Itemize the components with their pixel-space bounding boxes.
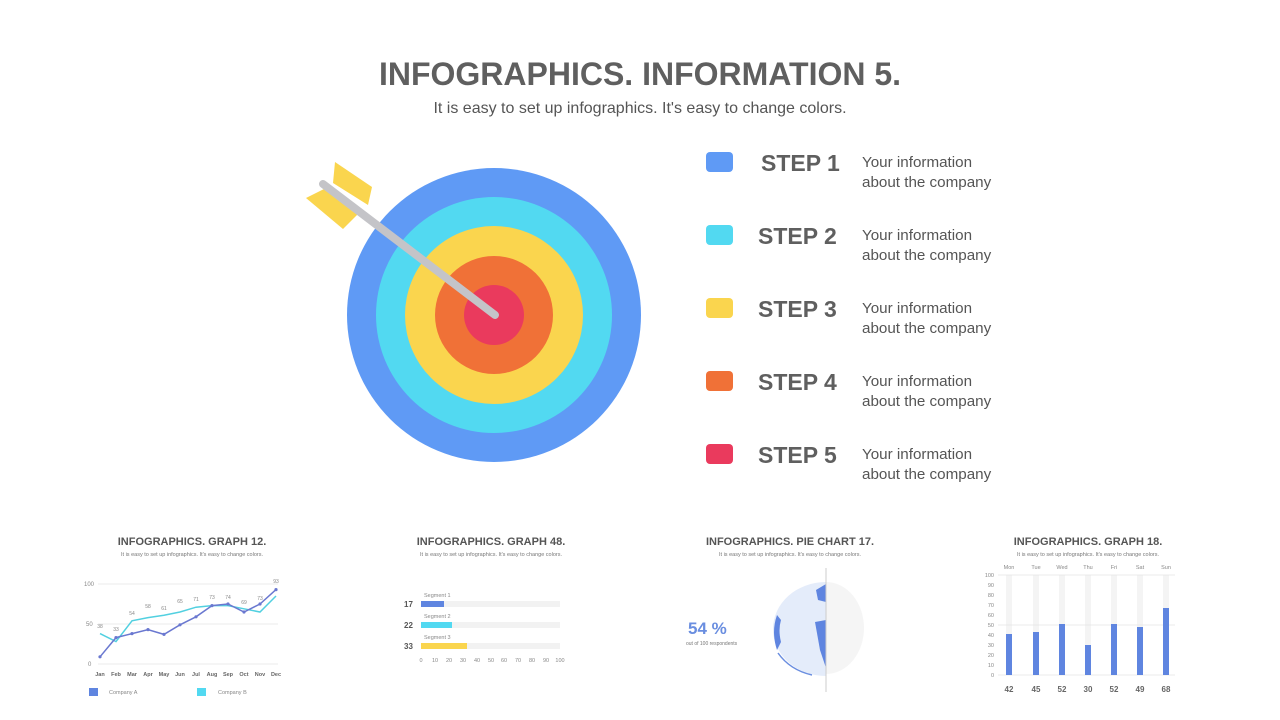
step 5: about the company [862,466,991,482]
panel: graph 18: Sun [1161,565,1171,571]
panel: graph 48: 100 [555,658,565,664]
panel: graph 12: Jun [175,672,186,678]
panel: graph 18: 70 [988,603,994,609]
panel: pie chart 17 [686,536,874,692]
panel: graph 18: 60 [988,613,994,619]
step 2: STEP 2 [758,223,837,249]
panel: graph 12: 74 [225,595,231,601]
subtitle: It is easy to set up infographics. It's easy to change colors. [433,100,847,117]
step 2: about the company [862,246,991,264]
panel: graph 12: Oct [239,672,249,678]
step 4: about the company [862,392,991,410]
panel: graph 12: Company A [109,690,138,696]
panel: graph 48: 30 [460,658,466,664]
step 1: Your information [862,154,972,171]
panel: graph 18: Sat [1136,565,1145,571]
panel: graph 18: 42 [1005,685,1014,694]
panel: graph 12: 65 [177,599,183,605]
panel: graph 48: 20 [446,658,452,664]
panel: graph 18: 50 [988,623,994,629]
panel: graph 12: Jan [95,672,105,678]
panel: graph 12: Jul [192,672,200,678]
panel: graph 18: It is easy to set up infographics. It's easy to change colors. [1017,552,1159,558]
panel: graph 12: 0 [88,662,92,668]
step 3: STEP 3 [758,296,837,322]
panel: pie chart 17: out of 100 respondents [686,641,738,647]
step 4: Your information [862,373,972,390]
panel: graph 12: May [159,672,170,678]
panel: pie chart 17: It is easy to set up infographics. It's easy to change colors. [719,552,861,558]
panel: graph 12: 73 [209,595,215,601]
panel: graph 12: Sep [223,672,234,678]
panel: graph 18: INFOGRAPHICS. GRAPH 18. [1014,536,1162,548]
panel: graph 48: It is easy to set up infographics. It's easy to change colors. [420,552,562,558]
steps list [706,150,992,482]
panel: graph 12: 100 [84,582,95,588]
panel: graph 48: 33 [404,642,413,651]
panel: graph 12: Mar [127,672,138,678]
step 5: Your information [862,446,972,463]
panel: graph 18: 40 [988,633,994,639]
step 1 [706,150,992,190]
panel: graph 12: It is easy to set up infographics. It's easy to change colors. [121,552,263,558]
step 3: Your information [862,300,972,317]
panel: graph 12: 50 [86,622,93,628]
panel: graph 18: 0 [991,673,994,679]
panel: graph 12: 54 [129,611,135,617]
panel: graph 12: 33 [113,627,119,633]
panel: graph 18: 20 [988,653,994,659]
step 5 [706,442,992,482]
panel: pie chart 17: INFOGRAPHICS. PIE CHART 17. [706,536,874,548]
panel: graph 48 [404,536,565,664]
panel: graph 12: INFOGRAPHICS. GRAPH 12. [118,536,266,548]
panel: graph 18: Thu [1083,565,1093,571]
step 3 [706,296,992,336]
panel: graph 48: 60 [501,658,507,664]
panel: graph 12: Nov [255,672,266,678]
panel: graph 48: Segment 2 [424,614,451,620]
step 4 [706,369,992,410]
panel: graph 48: 90 [543,658,549,664]
panel: graph 12 [84,536,281,696]
panel: graph 18: 10 [988,663,994,669]
panel: pie chart 17: 54 % [688,619,727,638]
panel: graph 18: 45 [1032,685,1041,694]
panel: graph 18 [985,536,1175,694]
panel: graph 18: 90 [988,583,994,589]
panel: graph 18: 52 [1110,685,1119,694]
panel: graph 18: Tue [1031,565,1041,571]
panel: graph 48: 70 [515,658,521,664]
panel: graph 12: 38 [97,624,103,630]
panel: graph 48: 80 [529,658,535,664]
panel: graph 18: Wed [1056,565,1068,571]
step 1: STEP 1 [761,150,840,176]
panel: graph 18: Mon [1004,565,1014,571]
panel: graph 48: 50 [488,658,494,664]
panel: graph 48: INFOGRAPHICS. GRAPH 48. [417,536,565,548]
panel: graph 18: Fri [1111,565,1117,571]
panel: graph 48: 10 [432,658,438,664]
panel: graph 48: Segment 1 [424,593,451,599]
panel: graph 12: Company B [218,690,247,696]
step 2: Your information [862,227,972,244]
panel: graph 12: Aug [207,672,217,678]
panel: graph 18: 80 [988,593,994,599]
panel: graph 12: 71 [193,597,199,603]
panel: graph 12: 58 [145,604,151,610]
panel: graph 12: 73 [257,596,263,602]
panel: graph 48: 40 [474,658,480,664]
panel: graph 12: 93 [273,579,279,585]
panel: graph 12: Apr [143,672,154,678]
panel: graph 48: 22 [404,621,413,630]
panel: graph 12: 69 [241,600,247,606]
panel: graph 48: 0 [419,658,423,664]
step 3: about the company [862,320,991,336]
panel: graph 18: 68 [1162,685,1171,694]
step 1: about the company [862,174,991,190]
panel: graph 18: 52 [1058,685,1067,694]
panel: graph 12: Dec [271,672,281,678]
step 2 [706,223,992,264]
panel: graph 48: 17 [404,600,413,609]
panel: graph 18: 30 [988,643,994,649]
panel: graph 18: 100 [985,573,994,579]
step 4: STEP 4 [758,369,837,395]
panel: graph 12: 61 [161,606,167,612]
panel: graph 18: 49 [1136,685,1145,694]
step 5: STEP 5 [758,442,837,468]
title: INFOGRAPHICS. INFORMATION 5. [379,56,901,92]
panel: graph 18: 30 [1084,685,1093,694]
panel: graph 48: Segment 3 [424,635,451,641]
panel: graph 12: Feb [111,672,122,678]
